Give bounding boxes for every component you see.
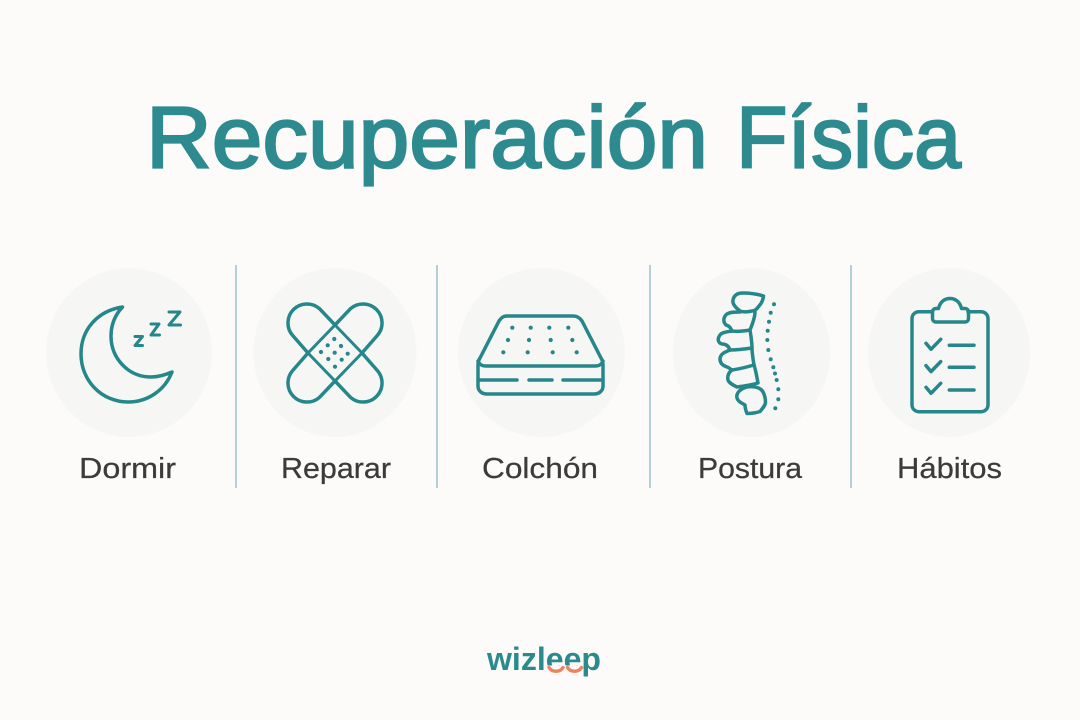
panel: Colchón [458,268,625,485]
label: Hábitos: Hábitos [897,453,1002,485]
logo: wizleep: wizleep [486,641,601,677]
panel: Postura [673,268,830,485]
title: Recuperación [146,90,708,186]
label: Dormir: Dormir [79,453,176,485]
label: Postura: Postura [698,453,803,485]
label: Reparar: Reparar [281,453,391,485]
icon: spine [718,293,780,414]
icon: mattress [478,316,603,394]
label: Colchón: Colchón [482,453,598,485]
panel: Dormir [46,268,212,485]
panel: Hábitos [868,268,1030,485]
icon: moon with zzz [81,307,180,402]
icon: crossed bandages [288,304,382,402]
title [146,90,962,186]
icon: clipboard checklist [912,298,988,412]
panel: Reparar [254,268,416,485]
title: Física [736,90,962,186]
